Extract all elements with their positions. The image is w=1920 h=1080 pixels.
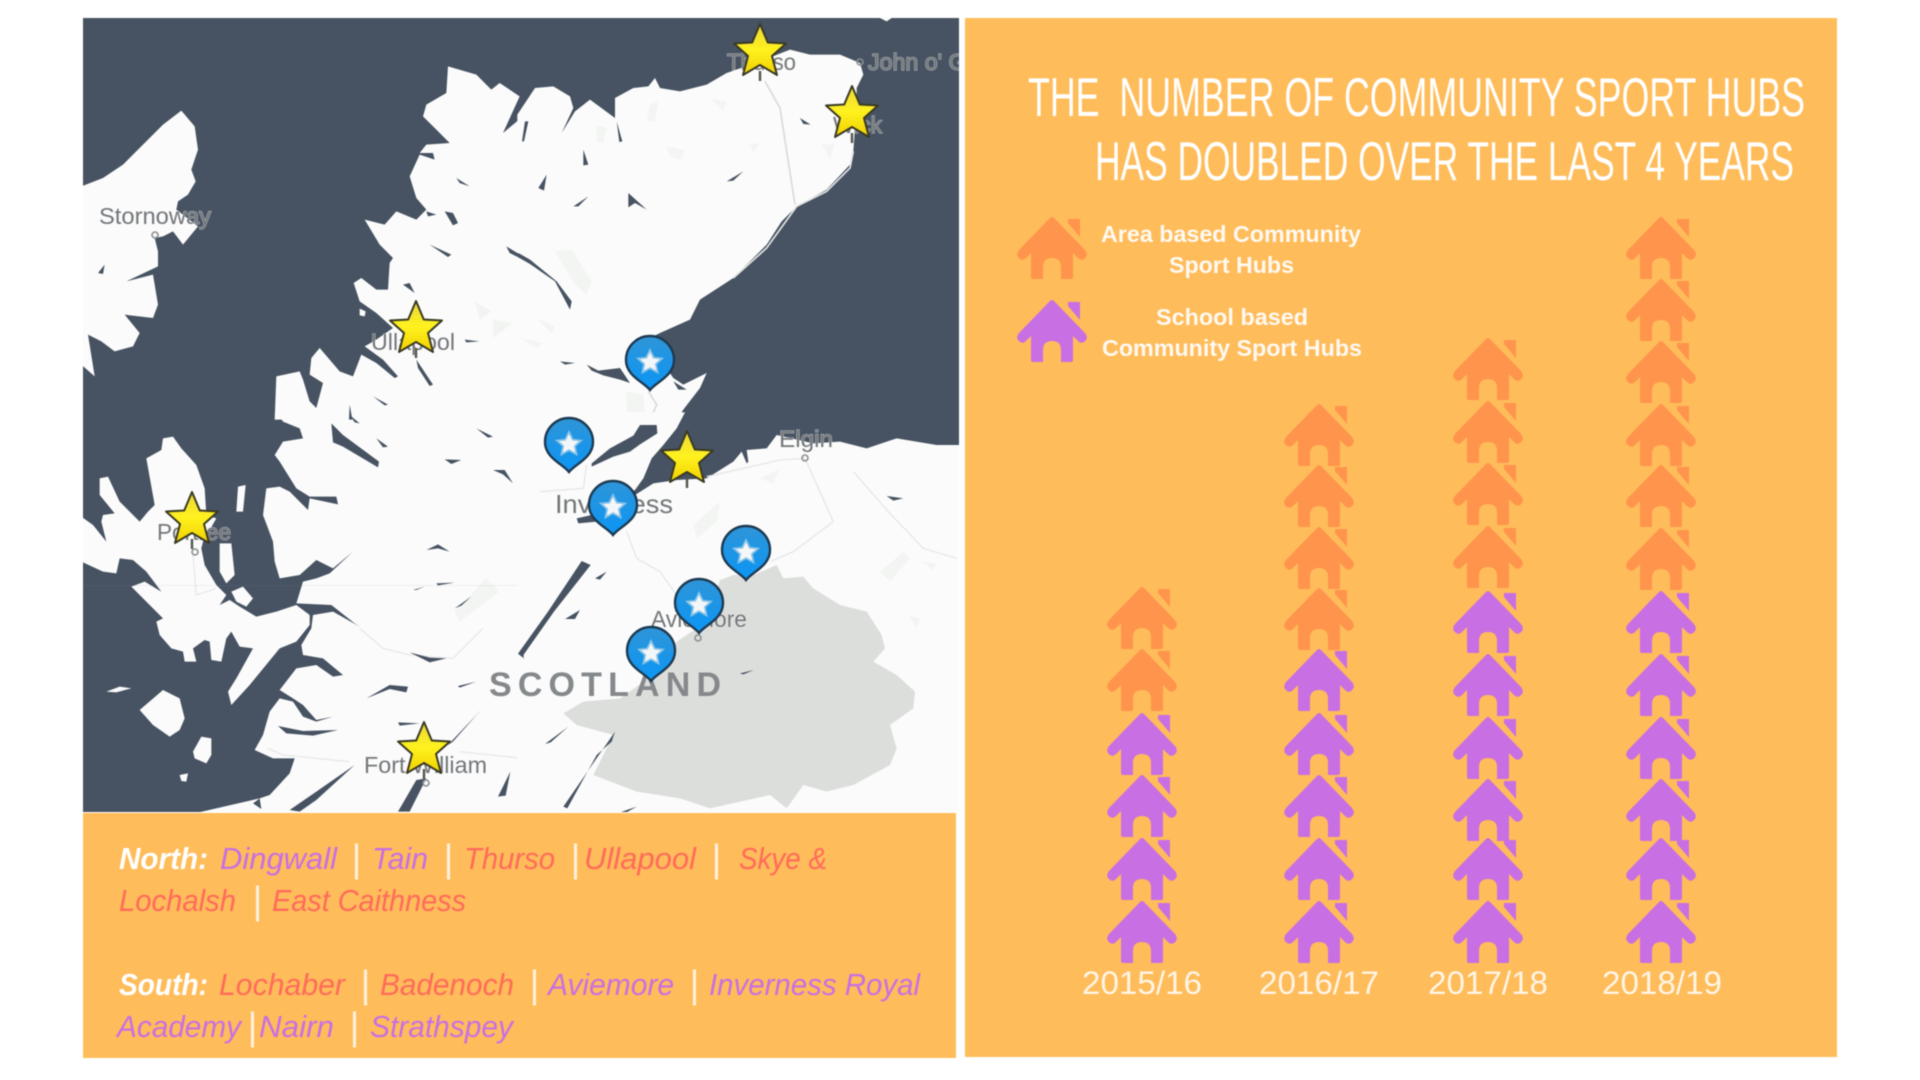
text: south hubs: | <box>247 1006 257 1048</box>
text: north hubs: Tain <box>372 841 428 876</box>
text: north hubs: Skye & <box>739 841 827 876</box>
label: Elgin: Elgin <box>779 426 833 452</box>
legend: school based hubs: Community Sport Hubs <box>1102 335 1362 361</box>
markers: yellow stars for area based hubs <box>166 24 878 779</box>
pictogram column: 2018/19: 2018/19 <box>1602 965 1722 1001</box>
text: south hubs: Inverness Royal <box>709 967 921 1002</box>
text: north hubs: East Caithness <box>272 883 466 918</box>
land: north west Highlands and Lewis <box>81 66 525 420</box>
text: north hubs: Dingwall <box>220 841 338 876</box>
pictogram column: 2018/19 <box>1602 217 1722 1001</box>
label: Wick: Wick <box>833 112 882 138</box>
land: north east Highlands and Caithness <box>517 18 892 420</box>
text: north hubs: | <box>711 838 721 880</box>
text: south hubs: | <box>349 1006 359 1048</box>
pictogram column: 2015/16 <box>1082 587 1202 1001</box>
legend: school based hubs <box>1017 300 1362 362</box>
label: Stornoway: Stornoway <box>99 203 212 229</box>
legend: area based hubs: Area based Community <box>1101 221 1361 247</box>
panel: community sport hubs chart <box>965 18 1837 1057</box>
pictogram column: 2016/17 <box>1259 404 1379 1001</box>
text: south hubs: Badenoch <box>380 967 514 1002</box>
city location dots <box>152 59 863 786</box>
label: Aviemore: Aviemore <box>651 606 747 632</box>
text: south hubs: Strathspey <box>370 1009 515 1044</box>
panel: map of the Scottish Highlands <box>81 18 1018 817</box>
text: south hubs: Academy <box>115 1009 243 1044</box>
text: north hubs: | <box>570 838 580 880</box>
text: north hubs: | <box>252 880 262 922</box>
lochs and firths <box>98 118 903 812</box>
text: south hubs: Nairn <box>259 1009 334 1044</box>
legend: area based hubs <box>1017 217 1361 279</box>
text: south hubs: | <box>360 964 370 1006</box>
text: north hubs: North: <box>119 841 208 876</box>
label: Ullapool: Ullapool <box>371 329 455 355</box>
text: south hubs: | <box>689 964 699 1006</box>
text: south hubs: Lochaber <box>219 967 347 1002</box>
legend: area based hubs: Sport Hubs <box>1169 252 1294 278</box>
label: Portree: Portree <box>157 519 231 545</box>
pictogram column: 2016/17: 2016/17 <box>1259 965 1379 1001</box>
label: John o' Groats: John o' Groats <box>868 49 1018 75</box>
markers: blue pins for school based hubs <box>545 336 770 681</box>
land: Inverness, Moray coast and Cairngorms <box>517 412 962 817</box>
title <box>1028 66 1805 192</box>
text: north hubs: | <box>443 838 453 880</box>
text: north hubs <box>119 838 827 922</box>
pictogram column: 2015/16: 2015/16 <box>1082 965 1202 1001</box>
panel: list of hubs north and south <box>83 813 956 1058</box>
text: north hubs: | <box>351 838 361 880</box>
text: south hubs: South: <box>119 967 208 1002</box>
label: Thurso: Thurso <box>727 49 796 75</box>
text: south hubs: | <box>529 964 539 1006</box>
label: SCOTLAND: SCOTLAND <box>489 666 721 704</box>
legend: school based hubs: School based <box>1156 304 1308 330</box>
land: Skye, Lochalsh and Lochaber <box>81 413 525 813</box>
label: Fort William: Fort William <box>364 752 487 778</box>
text: south hubs <box>115 964 921 1048</box>
pictogram column: 2017/18: 2017/18 <box>1428 965 1548 1001</box>
text: north hubs: Ullapool <box>584 841 697 876</box>
pictogram column: 2017/18 <box>1428 338 1548 1001</box>
text: south hubs: Aviemore <box>546 967 674 1002</box>
text: north hubs: Lochalsh <box>119 883 236 918</box>
label: Inverness: Inverness <box>555 489 673 519</box>
Cairngorms grey area <box>563 565 915 808</box>
text: north hubs: Thurso <box>464 841 555 876</box>
